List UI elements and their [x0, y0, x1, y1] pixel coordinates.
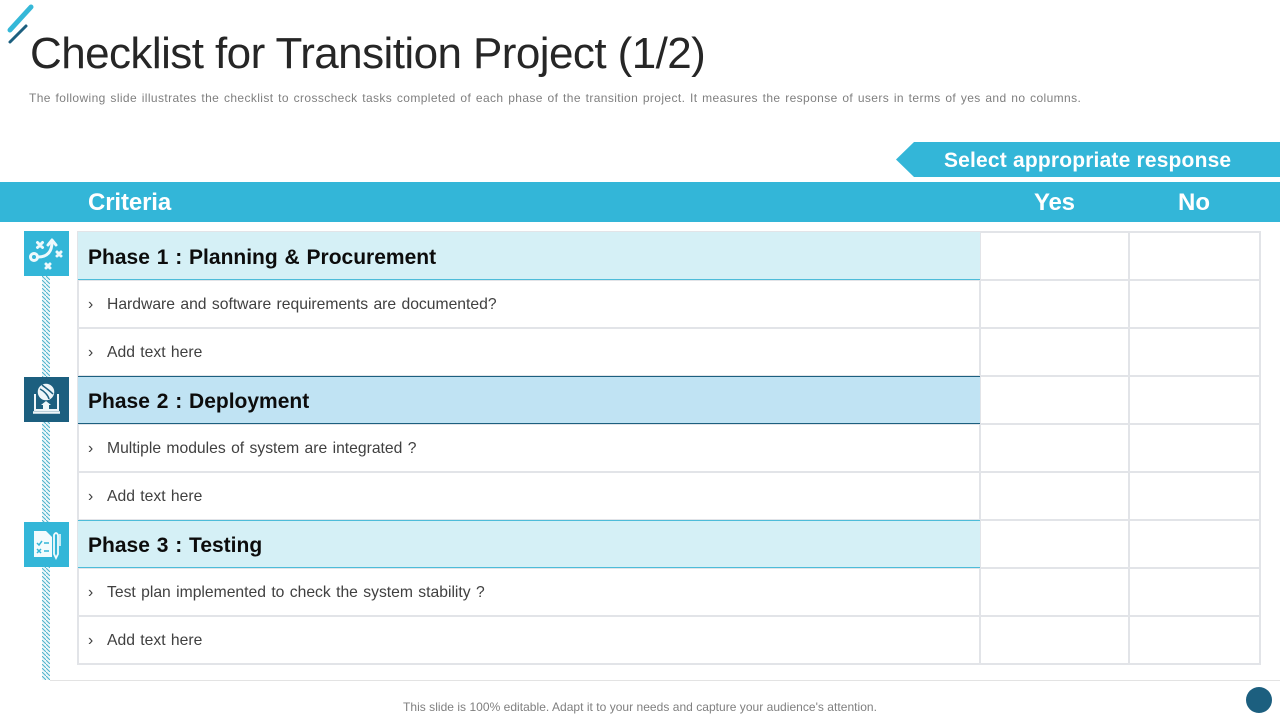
phase 1 item 1: ›	[88, 296, 93, 313]
icon: checklist and pen	[24, 522, 69, 567]
logo accent strokes	[8, 4, 34, 44]
phase 1 heading	[78, 232, 980, 280]
phase 3 item 2: Add text here	[107, 632, 202, 649]
phase 3 heading	[78, 520, 980, 568]
table grid	[77, 231, 1261, 665]
phase 1 item 2: ›	[88, 344, 93, 361]
timeline connector	[42, 276, 50, 680]
checklist table	[77, 231, 1261, 665]
phase 2 heading: Phase 2 : Deployment	[88, 390, 309, 413]
phase 1 item 2: Add text here	[107, 344, 202, 361]
phase 1 item 1: Hardware and software requirements are documented?	[107, 296, 497, 313]
header: no: No	[1178, 189, 1210, 216]
header: yes: Yes	[1034, 189, 1075, 216]
phase 2 item 2: Add text here	[107, 488, 202, 505]
response banner: Select appropriate response	[944, 149, 1231, 172]
response banner	[896, 142, 1280, 177]
footer note: This slide is 100% editable. Adapt it to your needs and capture your audience's attention.	[403, 700, 877, 714]
icon: strategy play	[24, 231, 69, 276]
phase 2 item 1: Multiple modules of system are integrated ?	[107, 440, 416, 457]
icon: laptop with ball	[24, 377, 69, 422]
phase 3 item 1: Test plan implemented to check the system stability ?	[107, 584, 485, 601]
phase 1 heading: Phase 1 : Planning & Procurement	[88, 246, 436, 269]
header: criteria: Criteria	[88, 189, 171, 216]
phase 2 item 2: ›	[88, 488, 93, 505]
phase 2 item 1: ›	[88, 440, 93, 457]
bottom rule	[50, 680, 1280, 681]
table header bar	[0, 182, 1280, 222]
phase 3 item 2: ›	[88, 632, 93, 649]
phase 3 item 1: ›	[88, 584, 93, 601]
phase 2 heading	[78, 376, 980, 424]
footer dot	[1246, 687, 1272, 713]
phase 3 heading: Phase 3 : Testing	[88, 534, 262, 557]
title: Checklist for Transition Project (1/2)	[30, 29, 705, 78]
subtitle: The following slide illustrates the checklist to crosscheck tasks completed of each phase of the transition project. It measures the response of users in terms of yes and no columns.	[29, 91, 1081, 105]
